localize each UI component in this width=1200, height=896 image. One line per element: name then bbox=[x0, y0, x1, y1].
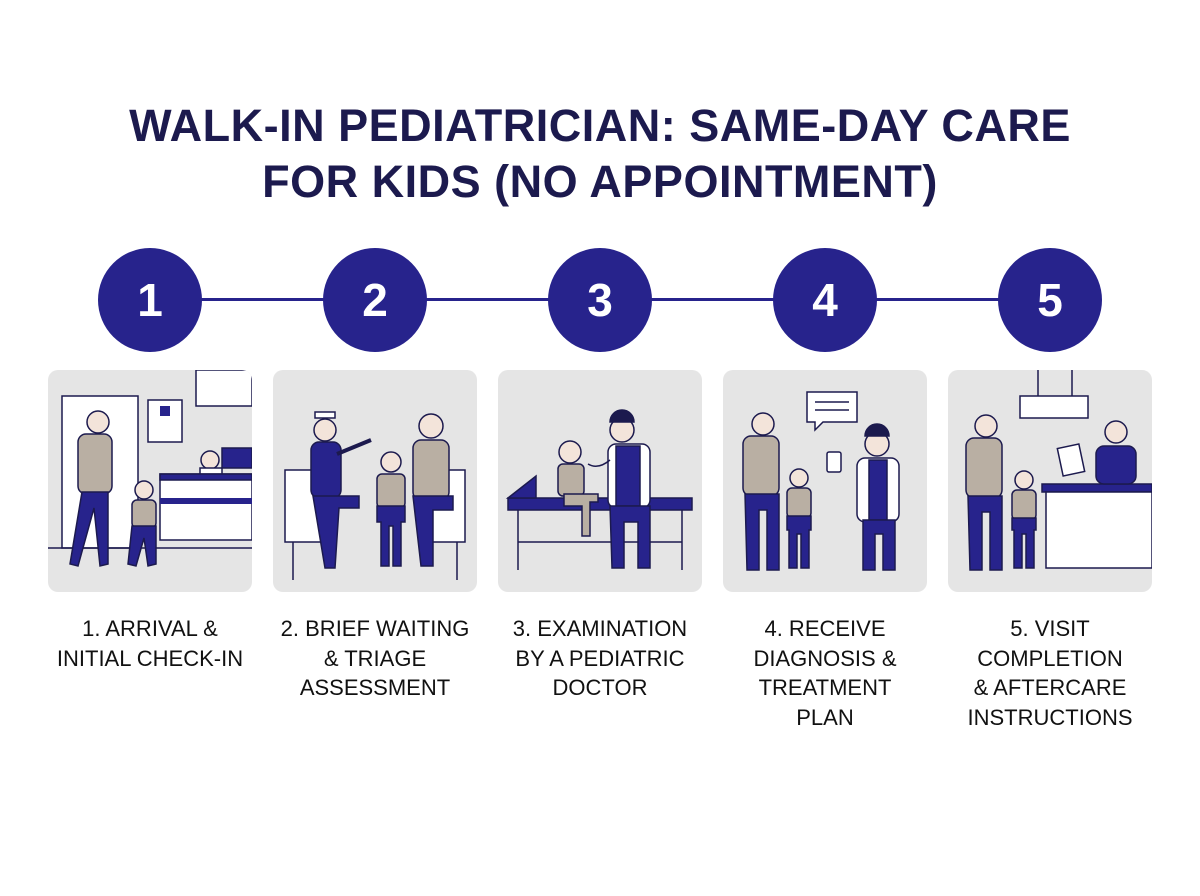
step circle 4 bbox=[773, 248, 877, 352]
step circle 5 bbox=[998, 248, 1102, 352]
label 5 bbox=[968, 616, 1132, 730]
panel: diagnosis bbox=[723, 370, 927, 592]
timeline connector bbox=[150, 298, 1050, 301]
label 3: 3. EXAMINATION bbox=[513, 616, 687, 641]
panel: examination bbox=[498, 370, 702, 592]
panel: completion bbox=[948, 370, 1152, 592]
label 5: COMPLETION bbox=[977, 646, 1123, 670]
label 4: DIAGNOSIS & bbox=[753, 646, 897, 670]
title bbox=[129, 100, 1071, 207]
step circle 1: 1 bbox=[137, 274, 163, 326]
title: FOR KIDS (NO APPOINTMENT) bbox=[262, 156, 938, 207]
label 1: INITIAL CHECK-IN bbox=[57, 646, 243, 670]
panel: triage bbox=[273, 370, 477, 592]
label 5: 5. VISIT bbox=[1010, 616, 1090, 641]
step circle 2: 2 bbox=[362, 274, 388, 326]
label 2: & TRIAGE bbox=[324, 646, 426, 670]
step circle 4: 4 bbox=[812, 274, 838, 326]
step circle 3 bbox=[548, 248, 652, 352]
label 3 bbox=[513, 616, 687, 700]
step circle 3: 3 bbox=[587, 274, 613, 326]
panel: arrival bbox=[48, 370, 252, 592]
label 3: BY A PEDIATRIC bbox=[515, 646, 685, 670]
label 2: 2. BRIEF WAITING bbox=[281, 616, 469, 641]
label 4: PLAN bbox=[796, 704, 854, 730]
label 5: INSTRUCTIONS bbox=[968, 704, 1132, 730]
label 4: TREATMENT bbox=[759, 675, 891, 700]
label 5: & AFTERCARE bbox=[974, 675, 1126, 700]
step circle 5: 5 bbox=[1037, 274, 1063, 326]
label 4: 4. RECEIVE bbox=[764, 616, 886, 641]
label 1 bbox=[57, 616, 243, 670]
step circle 1 bbox=[98, 248, 202, 352]
label 2: ASSESSMENT bbox=[300, 675, 450, 700]
label 1: 1. ARRIVAL & bbox=[82, 616, 218, 641]
title: WALK-IN PEDIATRICIAN: SAME-DAY CARE bbox=[129, 100, 1071, 151]
label 3: DOCTOR bbox=[553, 675, 647, 700]
label 2 bbox=[281, 616, 469, 700]
label 4 bbox=[753, 616, 897, 730]
step circle 2 bbox=[323, 248, 427, 352]
